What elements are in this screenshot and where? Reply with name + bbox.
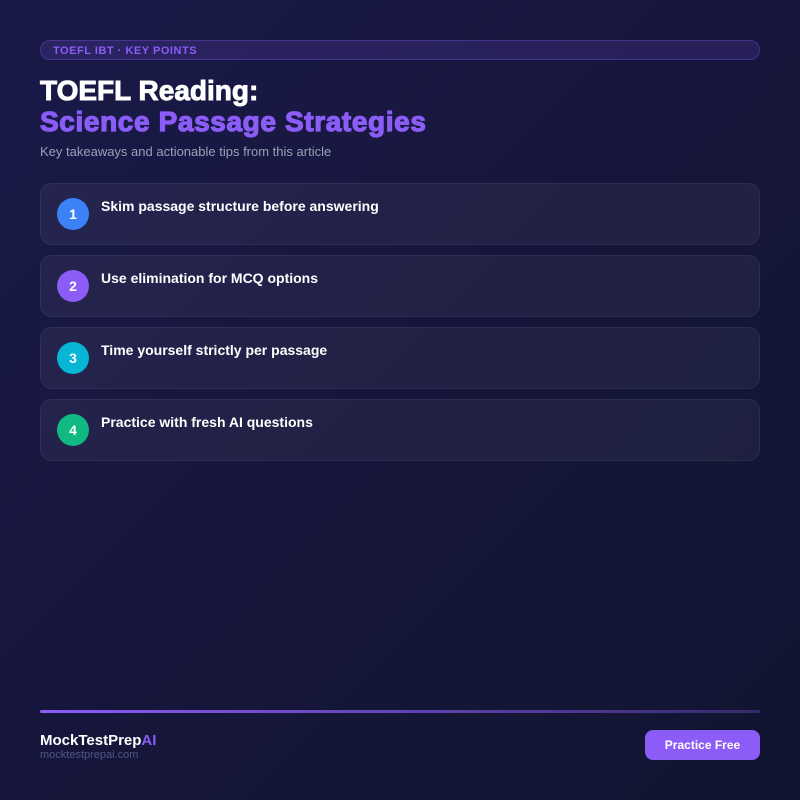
title: TOEFL Reading: xyxy=(40,75,258,106)
badge: TOEFL iBT key points: TOEFL IBT · KEY POINTS xyxy=(53,45,197,57)
icon: number 1 xyxy=(57,198,89,230)
website URL: mocktestprepai.com xyxy=(40,749,138,761)
subtitle: Key takeaways and actionable tips from this article xyxy=(40,144,331,159)
panel: point 1 xyxy=(40,183,760,245)
point 2 text: Use elimination for MCQ options xyxy=(101,270,318,286)
panel: point 4 xyxy=(40,399,760,461)
badge: TOEFL iBT key points xyxy=(40,40,760,60)
icon: number 4 xyxy=(57,414,89,446)
icon: number 2 xyxy=(57,270,89,302)
button: Practice Free: Practice Free xyxy=(665,738,740,752)
title: Science Passage Strategies xyxy=(40,106,427,137)
brand name: MockTestPrepAI xyxy=(40,732,156,749)
icon: number 4: 4 xyxy=(69,422,77,438)
point 4 text: Practice with fresh AI questions xyxy=(101,414,313,430)
point 3 text: Time yourself strictly per passage xyxy=(101,342,327,358)
icon: number 3: 3 xyxy=(69,350,77,366)
icon: number 1: 1 xyxy=(69,206,77,222)
icon: number 3 xyxy=(57,342,89,374)
button: Practice Free xyxy=(645,730,760,760)
point 1 text: Skim passage structure before answering xyxy=(101,198,379,214)
icon: number 2: 2 xyxy=(69,278,77,294)
panel: point 3 xyxy=(40,327,760,389)
footer gradient rule xyxy=(40,710,760,713)
panel: point 2 xyxy=(40,255,760,317)
title xyxy=(40,75,427,138)
